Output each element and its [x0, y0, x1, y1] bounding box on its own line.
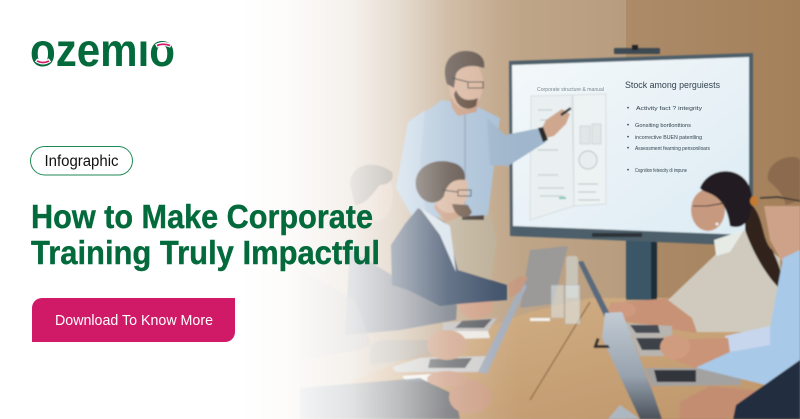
screen text: • [627, 135, 629, 141]
call to action button: Download To Know More [55, 312, 213, 329]
badge: Infographic: Infographic [44, 153, 119, 170]
screen text: • [627, 106, 629, 112]
laptops on the table [392, 246, 742, 419]
screen text: • [627, 123, 629, 129]
title [31, 198, 380, 271]
screen text: Cognition feteocity di impune [635, 168, 687, 174]
screen text: incorrective BUEN patentling [635, 135, 702, 141]
conference table [350, 298, 800, 419]
screen text: Activity fact ? integrity [636, 106, 702, 112]
person: man in blue shirt [660, 157, 800, 386]
screen text: • [627, 146, 629, 152]
call to action button [32, 298, 235, 342]
title: How to Make Corporate [31, 198, 373, 235]
presentation screen [509, 45, 753, 300]
screen text: Corporate structure & manual [537, 87, 604, 93]
screen text: Assessment fearning pensoniloars [635, 146, 710, 152]
screen text: • [627, 168, 629, 174]
water bottle and glasses [551, 256, 580, 324]
seated colleagues faded by the white overlay [300, 165, 460, 419]
screen text: Stock among perguiests [625, 80, 720, 90]
screen text [537, 80, 720, 174]
seated man in navy suit [391, 161, 528, 306]
person: woman with laptop [608, 171, 783, 333]
screen text: Gonsiting bortlonttions [635, 123, 691, 129]
title: Training Truly Impactful [31, 234, 380, 271]
hands of colleagues [427, 291, 493, 414]
presenter [396, 51, 572, 292]
person: front right hands on keyboard [680, 360, 800, 419]
badge: Infographic [30, 146, 132, 175]
logo: ozemio: ozemio [30, 24, 175, 76]
